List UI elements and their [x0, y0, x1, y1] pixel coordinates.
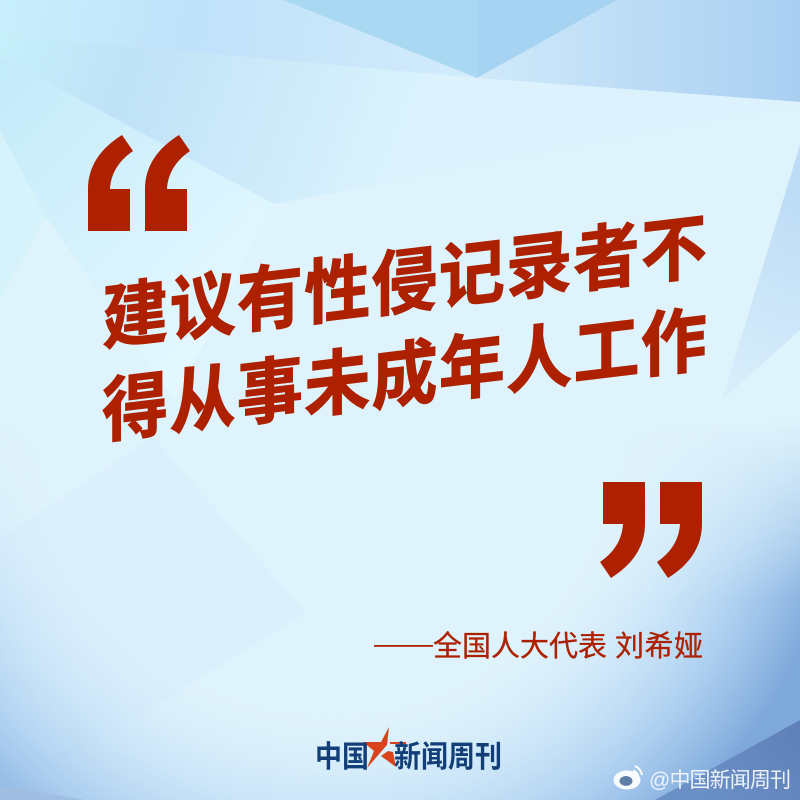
- logo: China Newsweek: 中国: [315, 741, 369, 774]
- attribution: 刘希娅: [615, 630, 703, 663]
- logo: China Newsweek: 新闻周刊: [394, 741, 502, 774]
- opening quotation mark: [88, 135, 190, 231]
- headline line 1: 建议有性侵记录者不: [102, 207, 707, 359]
- weibo watermark: @中国新闻周刊: [649, 769, 791, 792]
- icon: weibo: [614, 766, 642, 790]
- headline quote: [102, 207, 707, 452]
- closing quotation mark: [600, 482, 702, 578]
- attribution: [374, 630, 703, 663]
- icon: logo star: [363, 727, 406, 768]
- headline line 2: 得从事未成年人工作: [102, 300, 707, 452]
- logo: China Newsweek: [315, 727, 502, 774]
- attribution: 全国人大代表: [433, 630, 607, 663]
